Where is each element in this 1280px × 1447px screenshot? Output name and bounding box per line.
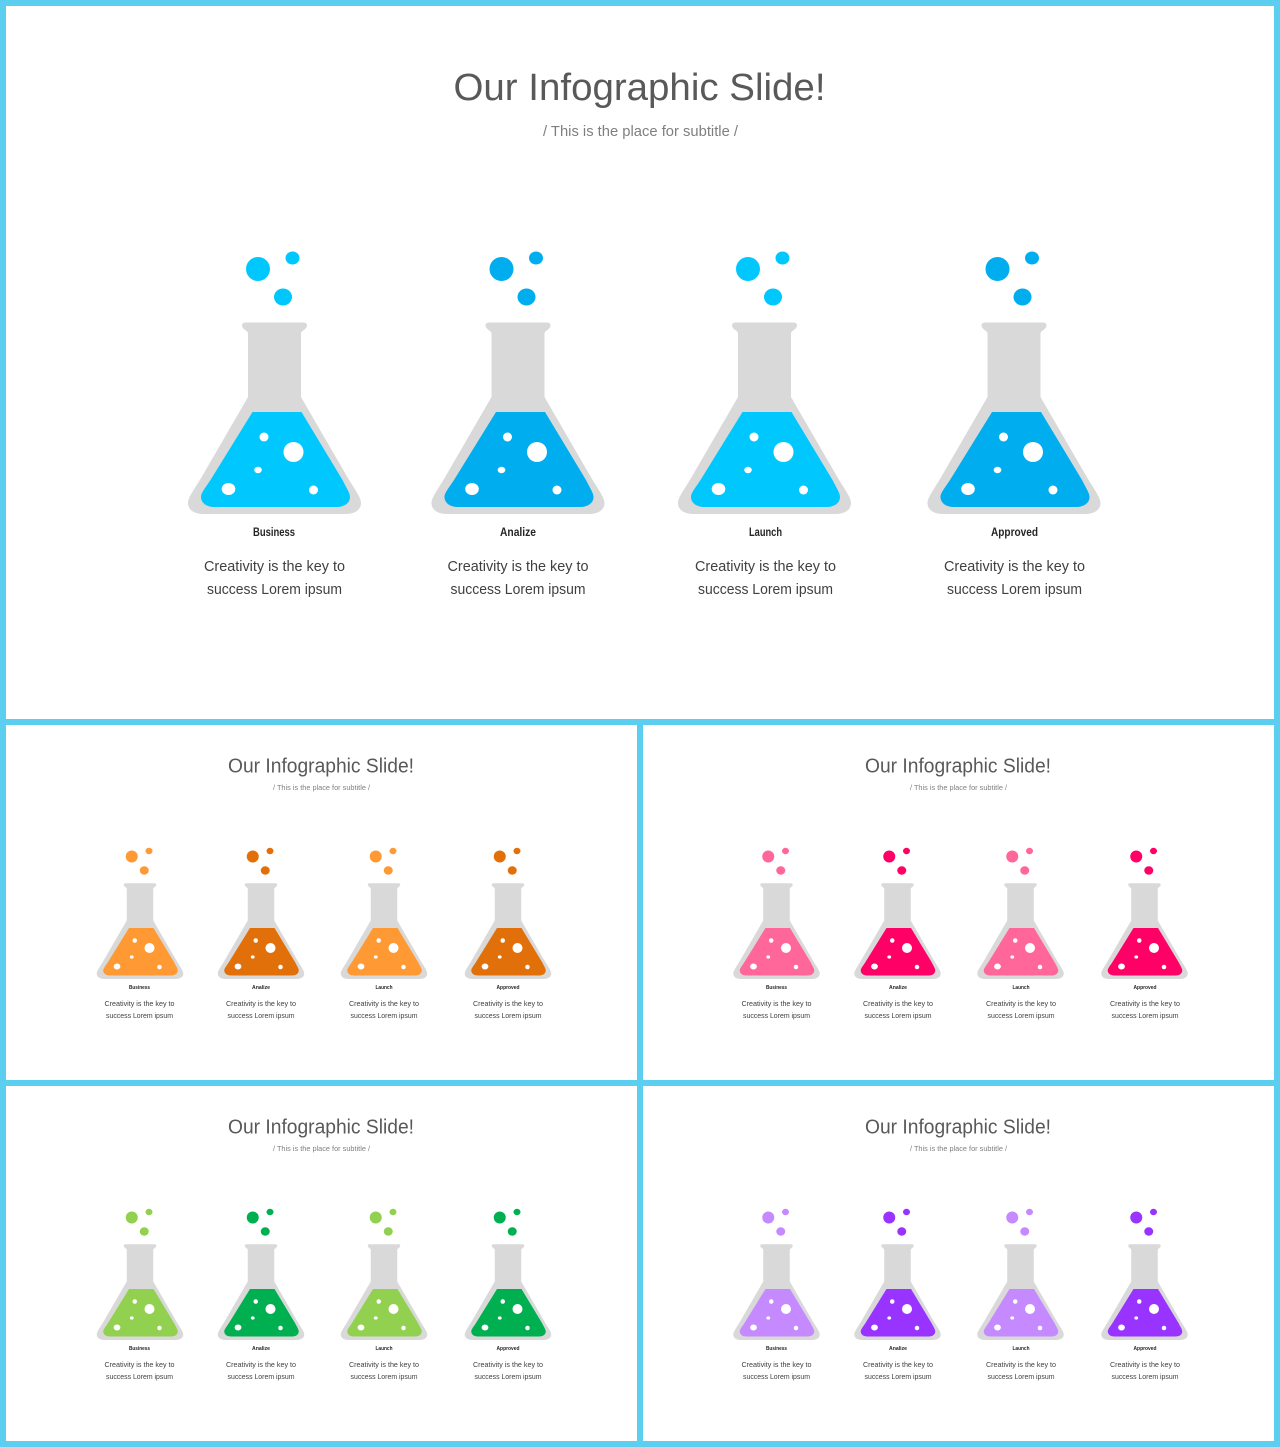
flask: Business: Creativity is the key to <box>204 559 345 575</box>
flask: Analize <box>854 1209 941 1381</box>
flask: Business: success Lorem ipsum <box>207 582 342 598</box>
flask: Launch <box>977 848 1064 1020</box>
flask: Business: success Lorem ipsum <box>106 1011 173 1020</box>
flask: Business <box>733 848 820 1020</box>
flask: Analize: Analize <box>889 985 907 991</box>
flask: Launch: Launch <box>1012 1346 1030 1352</box>
flask: Analize: Creativity is the key to <box>226 999 296 1008</box>
flask: Business: success Lorem ipsum <box>743 1011 810 1020</box>
flask: Approved <box>928 252 1100 598</box>
flask: Business: Creativity is the key to <box>104 999 174 1008</box>
flask: Approved: Approved <box>496 1346 520 1352</box>
flask: Business <box>188 252 361 598</box>
flask: Launch <box>341 1209 427 1381</box>
flask: Business: Creativity is the key to <box>104 1360 174 1369</box>
flask: Business: Business <box>766 985 787 991</box>
flask: Business: Business <box>129 985 150 991</box>
flask: Approved: Approved <box>991 527 1038 539</box>
title: Our Infographic Slide! <box>865 756 1051 778</box>
title: Our Infographic Slide! <box>454 67 826 109</box>
subtitle: / This is the place for subtitle / <box>273 1144 371 1153</box>
flask: Launch <box>341 848 427 1020</box>
panel: pink slide <box>643 725 1274 1080</box>
flask: Approved: Approved <box>496 985 520 991</box>
flask: Business: Creativity is the key to <box>742 999 812 1008</box>
title: Our Infographic Slide! <box>228 1116 414 1138</box>
flask: Launch: success Lorem ipsum <box>988 1372 1054 1381</box>
flask: Analize: Creativity is the key to <box>226 1360 296 1369</box>
flask: Business: success Lorem ipsum <box>106 1372 173 1381</box>
panel: purple slide <box>643 1086 1274 1441</box>
panel: green slide <box>6 1086 637 1441</box>
flask: Analize: Analize <box>889 1346 907 1352</box>
flask: Approved: success Lorem ipsum <box>474 1011 542 1020</box>
flask: Launch: success Lorem ipsum <box>698 582 833 598</box>
flask: Launch: Creativity is the key to <box>349 999 419 1008</box>
flask: Approved: success Lorem ipsum <box>1112 1011 1178 1020</box>
flask: Approved: Creativity is the key to <box>944 559 1085 575</box>
subtitle: / This is the place for subtitle / <box>273 783 371 792</box>
flask: Business <box>97 1209 183 1381</box>
flask: Analize: Creativity is the key to <box>863 999 933 1008</box>
flask: Analize <box>218 1209 304 1381</box>
flask: Business <box>733 1209 820 1381</box>
flask: Launch: Creativity is the key to <box>695 559 836 575</box>
flask: Business: Business <box>129 1346 150 1352</box>
panel: main blue slide <box>6 6 1274 719</box>
subtitle: / This is the place for subtitle / <box>910 783 1008 792</box>
flask: Analize: success Lorem ipsum <box>228 1372 294 1381</box>
title: Our Infographic Slide! <box>865 1116 1051 1138</box>
flask: Approved: Creativity is the key to <box>473 999 543 1008</box>
flask: Approved <box>465 1209 551 1381</box>
flask: Business: Business <box>253 527 295 539</box>
flask: Analize: success Lorem ipsum <box>450 582 586 598</box>
flask: Approved <box>1101 1209 1188 1381</box>
flask: Launch: Launch <box>376 985 393 991</box>
flask: Launch: Launch <box>749 527 782 539</box>
flask: Launch: Creativity is the key to <box>986 999 1056 1008</box>
flask: Launch: Launch <box>376 1346 393 1352</box>
flask: Analize <box>218 848 304 1020</box>
flask: Analize <box>854 848 941 1020</box>
flask: Approved: Creativity is the key to <box>1110 1360 1180 1369</box>
subtitle: / This is the place for subtitle / <box>543 124 739 140</box>
flask: Launch <box>678 252 851 598</box>
flask: Launch <box>977 1209 1064 1381</box>
flask: Analize: success Lorem ipsum <box>864 1372 932 1381</box>
flask: Approved: Creativity is the key to <box>473 1360 543 1369</box>
flask: Approved <box>1101 848 1188 1020</box>
panel: orange slide <box>6 725 637 1080</box>
flask: Analize: success Lorem ipsum <box>864 1011 932 1020</box>
flask: Launch: success Lorem ipsum <box>988 1011 1054 1020</box>
flask: Launch: Creativity is the key to <box>349 1360 419 1369</box>
flask: Analize <box>432 252 604 598</box>
title: Our Infographic Slide! <box>228 756 414 778</box>
flask: Approved: success Lorem ipsum <box>947 582 1082 598</box>
flask: Analize: Analize <box>252 985 270 991</box>
flask: Analize: Creativity is the key to <box>448 559 588 575</box>
flask: Launch: success Lorem ipsum <box>350 1372 418 1381</box>
flask: Analize: Creativity is the key to <box>863 1360 933 1369</box>
flask: Analize: success Lorem ipsum <box>228 1011 294 1020</box>
flask: Approved: success Lorem ipsum <box>474 1372 542 1381</box>
flask: Business: success Lorem ipsum <box>743 1372 810 1381</box>
flask: Approved <box>465 848 551 1020</box>
subtitle: / This is the place for subtitle / <box>910 1144 1008 1153</box>
flask: Launch: Creativity is the key to <box>986 1360 1056 1369</box>
flask: Approved: Creativity is the key to <box>1110 999 1180 1008</box>
flask: Business: Business <box>766 1346 787 1352</box>
flask: Business: Creativity is the key to <box>742 1360 812 1369</box>
flask: Launch: Launch <box>1012 985 1030 991</box>
flask: Approved: Approved <box>1134 1346 1157 1352</box>
flask: Approved: Approved <box>1134 985 1157 991</box>
flask: Analize: Analize <box>500 527 536 539</box>
flask: Approved: success Lorem ipsum <box>1112 1372 1178 1381</box>
flask: Business <box>97 848 183 1020</box>
flask: Launch: success Lorem ipsum <box>350 1011 418 1020</box>
flask: Analize: Analize <box>252 1346 270 1352</box>
